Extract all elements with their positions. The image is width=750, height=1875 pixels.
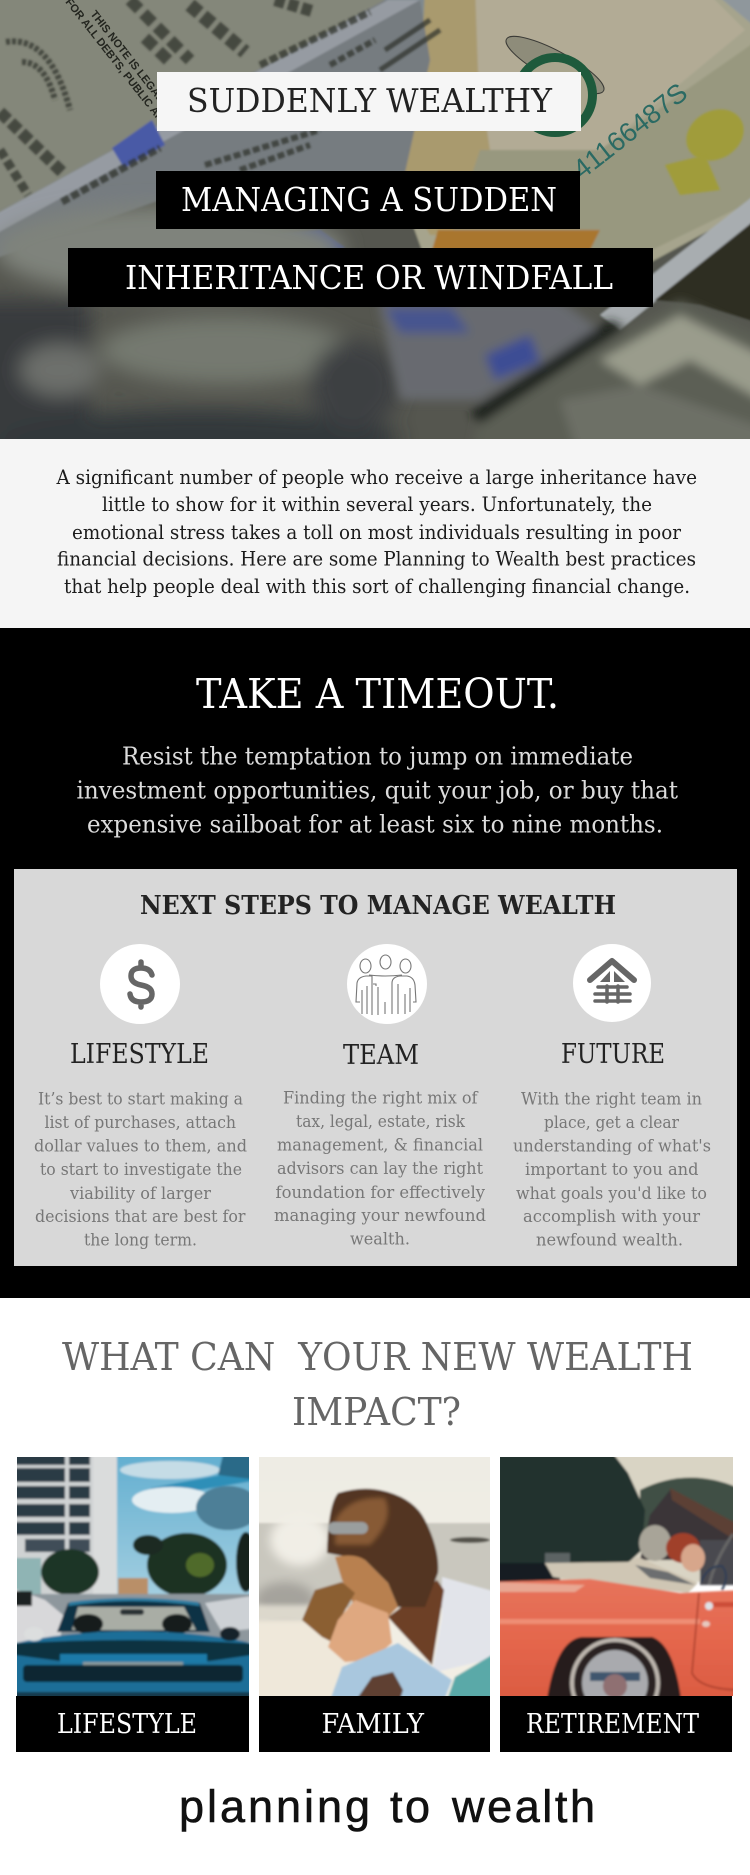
- column: future: place, get a clear: [544, 1113, 680, 1133]
- card: family: [259, 1457, 490, 1752]
- column: team: tax, legal, estate, risk: [296, 1112, 466, 1132]
- column: team: TEAM: [343, 1040, 419, 1071]
- hero photo: banknotes: [0, 0, 750, 480]
- logo: planning to wealth: planning: [179, 1781, 370, 1832]
- label: lifestyle: LIFESTYLE: [57, 1709, 197, 1740]
- panel: introduction: A significant number of people who receive a large inheritance have: [56, 465, 697, 489]
- panel: take a timeout: [0, 628, 750, 1298]
- column: lifestyle: to start to investigate the: [40, 1160, 242, 1180]
- column: lifestyle: the long term.: [84, 1230, 197, 1250]
- panel: introduction: [0, 439, 750, 628]
- portrait blur: [0, 202, 402, 439]
- column: future: understanding of what's: [513, 1137, 711, 1157]
- note microtext: THIS NOTE IS LEGAL: [88, 8, 166, 105]
- title line: Suddenly Wealthy: [157, 72, 581, 131]
- label: lifestyle: [16, 1696, 249, 1752]
- card: retirement: [500, 1457, 733, 1752]
- column: lifestyle: dollar values to them, and: [34, 1137, 247, 1157]
- card: lifestyle: [16, 1457, 249, 1752]
- photo: red convertible: [500, 1457, 733, 1696]
- column: team: wealth.: [350, 1230, 410, 1250]
- column: future: With the right team in: [521, 1090, 702, 1110]
- icon: house: [573, 944, 651, 1022]
- column: future: FUTURE: [561, 1039, 665, 1070]
- column: future: accomplish with your: [523, 1207, 701, 1227]
- timeout paragraph: expensive sailboat for at least six to nine months.: [87, 810, 663, 838]
- icon: dollar: [100, 944, 180, 1024]
- panel: next steps: [14, 869, 737, 1266]
- title line: Inheritance or windfall: [68, 248, 653, 307]
- heading: what can your new wealth impact: [62, 1335, 693, 1434]
- logo: planning to wealth: wealth: [451, 1781, 595, 1832]
- hero banner: [0, 0, 750, 480]
- column: lifestyle: It’s best to start making a: [38, 1090, 243, 1110]
- column: team: advisors can lay the right: [277, 1159, 483, 1179]
- heading: what can your new wealth impact: WHAT CAN YOUR NEW WEALTH: [62, 1335, 693, 1379]
- title line: Inheritance or windfall: INHERITANCE OR WINDFALL: [125, 258, 613, 297]
- panel: impact: [16, 1342, 733, 1832]
- label: family: FAMILY: [322, 1709, 425, 1740]
- title line: Suddenly Wealthy: SUDDENLY WEALTHY: [187, 81, 553, 120]
- column: lifestyle: [34, 1039, 247, 1250]
- label: retirement: [500, 1696, 732, 1752]
- column: team: management, & financial: [277, 1136, 483, 1156]
- title line: Managing a sudden: MANAGING A SUDDEN: [181, 180, 557, 219]
- column: lifestyle: LIFESTYLE: [70, 1039, 209, 1070]
- label: retirement: RETIREMENT: [526, 1709, 699, 1740]
- icon: team: [347, 944, 427, 1024]
- heading: take a timeout: TAKE A TIMEOUT.: [196, 670, 559, 718]
- panel: introduction: emotional stress takes a toll on most individuals resulting in poor: [72, 520, 681, 544]
- timeout paragraph: Resist the temptation to jump on immediate: [122, 742, 633, 770]
- column: team: [274, 1040, 486, 1250]
- column: lifestyle: list of purchases, attach: [44, 1113, 236, 1133]
- column: future: important to you and: [525, 1160, 699, 1180]
- timeout paragraph: investment opportunities, quit your job, or buy that: [76, 776, 678, 804]
- heading: what can your new wealth impact: IMPACT?: [292, 1390, 461, 1434]
- column: future: newfound wealth.: [536, 1230, 683, 1250]
- label: family: [259, 1696, 490, 1752]
- column: team: foundation for effectively: [276, 1183, 485, 1203]
- panel: introduction: that help people deal with this sort of challenging financial change.: [64, 574, 690, 598]
- hero photo: banknotes: FOR ALL DEBTS, PUBLIC AND: [63, 0, 171, 131]
- timeout paragraph: [76, 742, 678, 838]
- note details: [0, 0, 440, 202]
- photo: blue sports car: [17, 1457, 249, 1696]
- title line: Managing a sudden: [156, 171, 580, 229]
- panel: introduction: financial decisions. Here are some Planning to Wealth best practices: [57, 546, 696, 570]
- column: future: what goals you'd like to: [516, 1184, 707, 1204]
- photo: mother and son: [259, 1457, 490, 1696]
- hero photo: banknotes: 41166487S: [567, 77, 693, 185]
- column: lifestyle: decisions that are best for: [35, 1207, 246, 1227]
- column: team: Finding the right mix of: [283, 1088, 479, 1108]
- column: future: [513, 1039, 711, 1250]
- logo: planning to wealth: to: [390, 1781, 430, 1832]
- column: team: managing your newfound: [274, 1206, 486, 1226]
- panel: introduction: little to show for it within several years. Unfortunately, the: [102, 492, 652, 516]
- heading: next steps: NEXT STEPS TO MANAGE WEALTH: [140, 891, 616, 921]
- logo: planning to wealth: [179, 1781, 595, 1832]
- column: lifestyle: viability of larger: [69, 1184, 212, 1204]
